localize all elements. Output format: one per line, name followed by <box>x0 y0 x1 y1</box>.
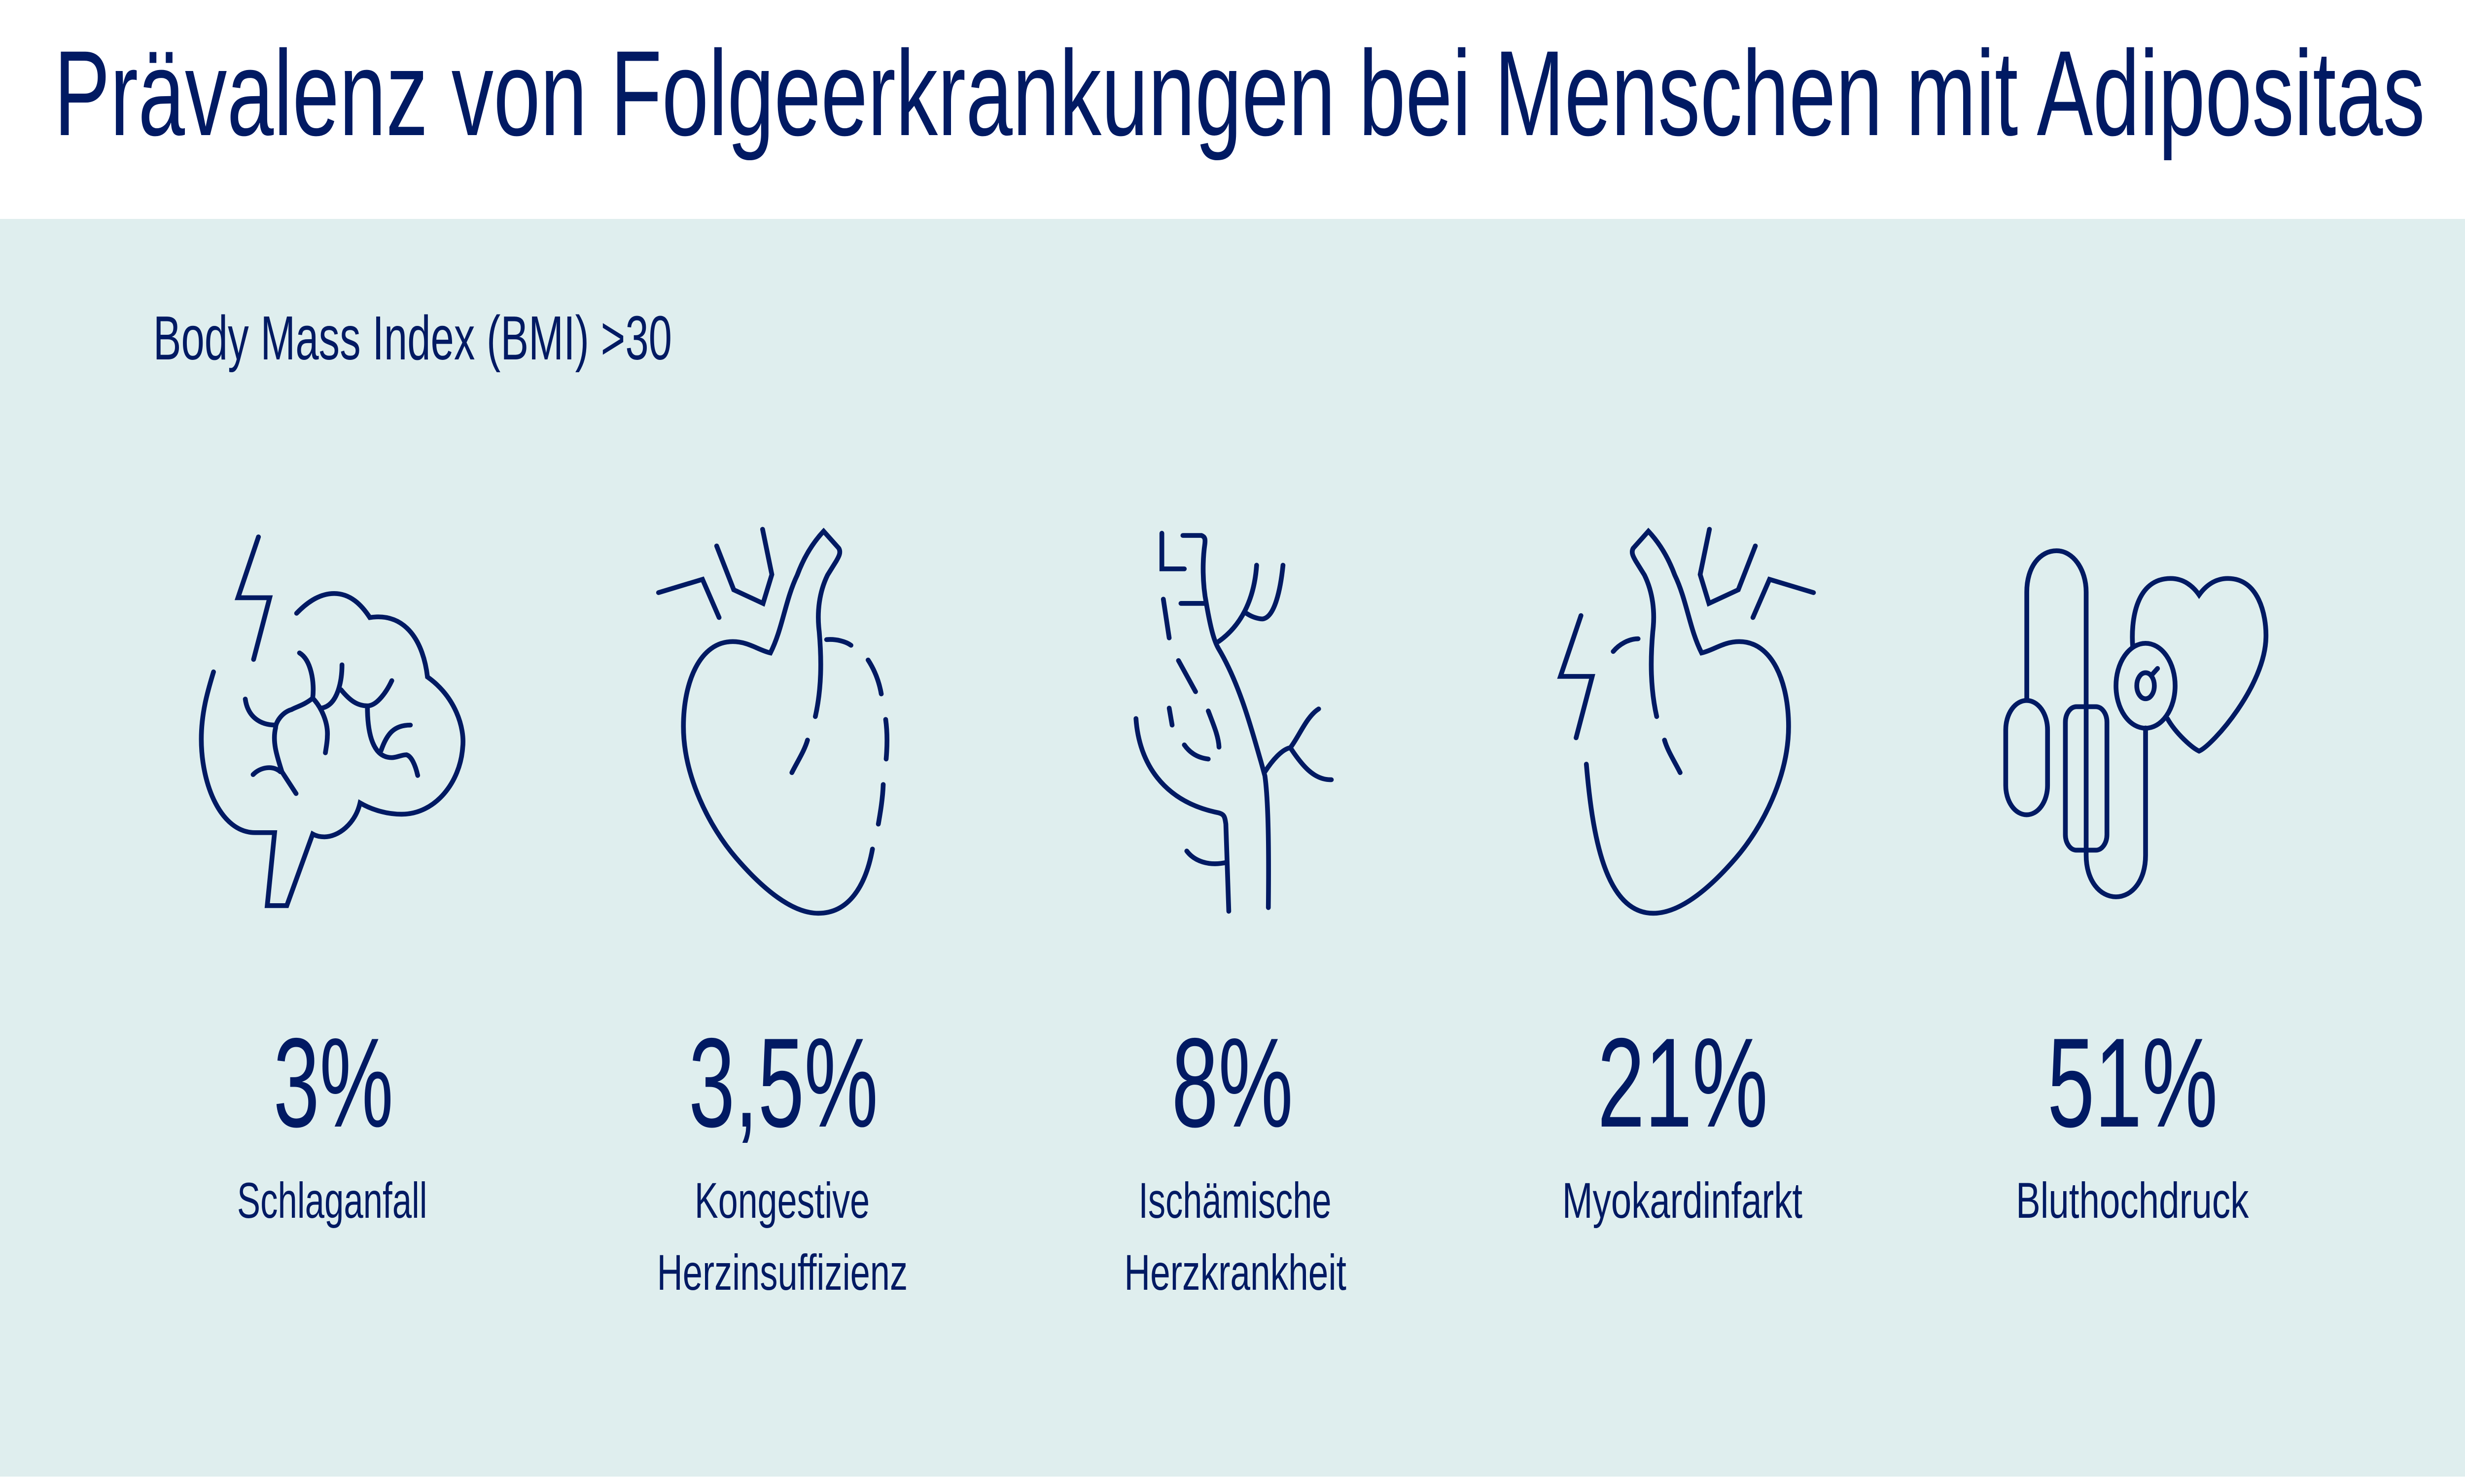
header band <box>0 0 2465 219</box>
statistic: Kongestive Herzinsuffizienz 3,5% <box>657 1012 908 1301</box>
statistic: Ischämische Herzkrankheit 8%: Herzkrankheit <box>1124 1244 1346 1301</box>
title: Prävalenz von Folgeerkrankungen bei Menschen mit Adipositas <box>54 26 2425 161</box>
statistic: Kongestive Herzinsuffizienz 3,5%: Kongestive <box>695 1172 870 1229</box>
statistic: Ischämische Herzkrankheit 8%: 8% <box>1171 1012 1293 1154</box>
icon: heart with dashed outline <box>659 529 887 913</box>
icon: blood pressure monitor with heart <box>2006 551 2266 897</box>
statistic: Myokardinfarkt 21%: 21% <box>1597 1012 1768 1154</box>
statistic: Schlaganfall 3%: 3% <box>273 1012 393 1154</box>
statistic: Myokardinfarkt 21% <box>1562 1012 1802 1229</box>
subtitle: BMI: Body Mass Index (BMI) >30 <box>153 304 672 373</box>
statistic: Kongestive Herzinsuffizienz 3,5%: Herzinsuffizienz <box>657 1244 908 1301</box>
statistic: Schlaganfall 3% <box>237 1012 427 1229</box>
statistic: Bluthochdruck 51% <box>2016 1012 2249 1229</box>
statistic: Bluthochdruck 51%: Bluthochdruck <box>2016 1172 2249 1229</box>
statistic: Ischämische Herzkrankheit 8%: Ischämische <box>1138 1172 1332 1229</box>
icon: coronary artery <box>1136 533 1332 911</box>
statistic: Ischämische Herzkrankheit 8% <box>1124 1012 1346 1301</box>
statistic: Schlaganfall 3%: Schlaganfall <box>237 1172 427 1229</box>
icon: heart with lightning <box>1560 529 1813 913</box>
icon: brain with lightning <box>201 537 463 906</box>
statistic: Myokardinfarkt 21%: Myokardinfarkt <box>1562 1172 1802 1229</box>
statistic: Bluthochdruck 51%: 51% <box>2047 1012 2218 1154</box>
statistic: Kongestive Herzinsuffizienz 3,5%: 3,5% <box>689 1012 878 1154</box>
